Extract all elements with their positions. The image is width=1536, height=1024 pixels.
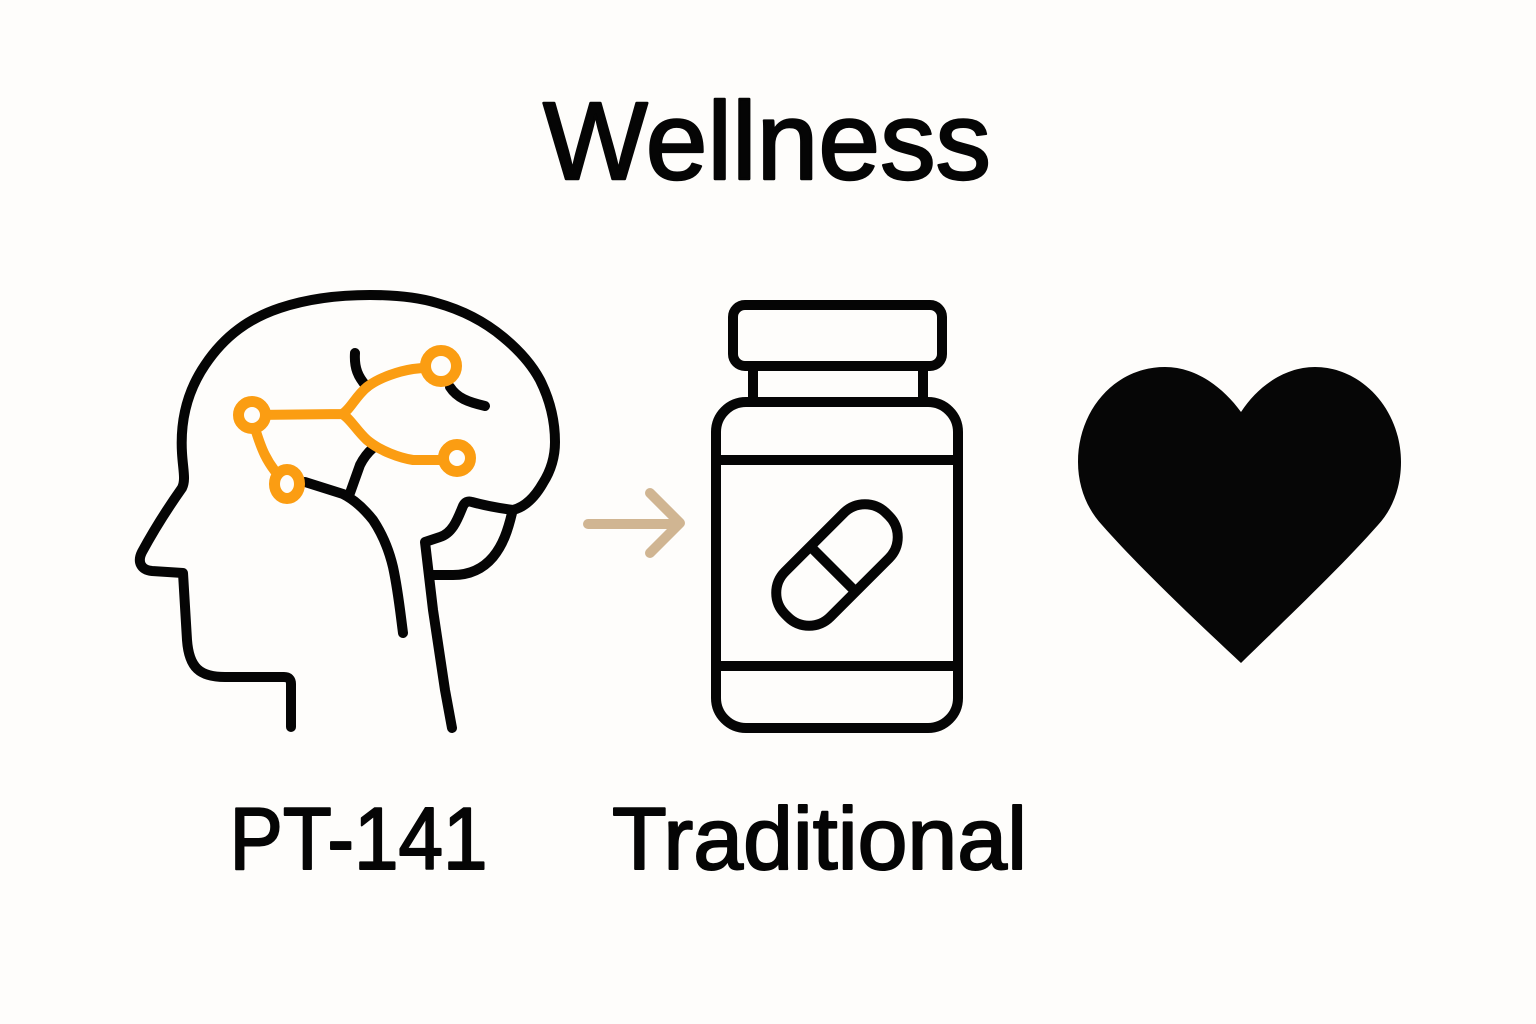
capsule <box>764 492 910 638</box>
icon: head with brain pathways <box>140 295 555 728</box>
label: PT-141: PT-141 <box>230 789 488 888</box>
icon: heart <box>1078 367 1401 663</box>
head outline <box>140 295 555 728</box>
orange nodes <box>238 402 266 428</box>
title: Wellness <box>543 80 991 203</box>
brain fold <box>355 353 485 406</box>
orange neural pathways <box>252 366 457 484</box>
arrow <box>588 493 680 553</box>
neck <box>753 366 923 402</box>
jaw and throat <box>430 513 512 575</box>
brain stem <box>305 448 403 633</box>
label: Traditional: Traditional <box>612 789 1027 888</box>
label lines <box>716 460 958 666</box>
cap <box>733 305 942 366</box>
icon: pill bottle <box>716 305 958 728</box>
body <box>716 402 958 728</box>
